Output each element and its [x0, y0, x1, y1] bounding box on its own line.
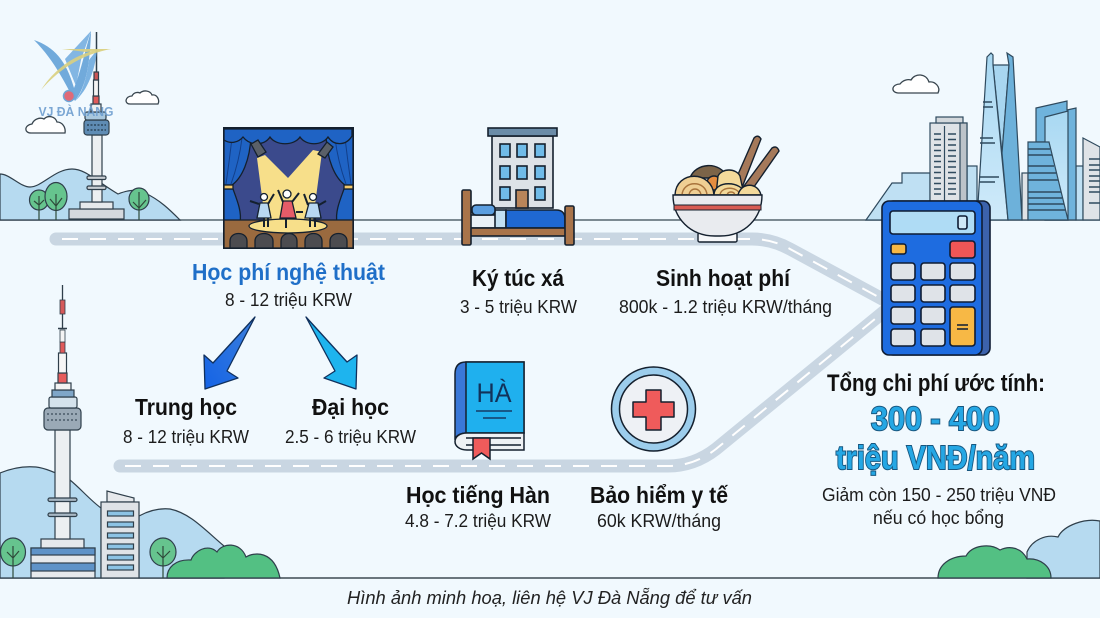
- scene: bottom-right bushes: [938, 520, 1100, 578]
- heading: Học tiếng Hàn: 4.8 - 7.2 triệu KRW: [405, 511, 551, 531]
- heading: Bảo hiểm y tế: 60k KRW/tháng: [597, 511, 721, 531]
- heading: Học tiếng Hàn: Học tiếng Hàn: [406, 482, 550, 508]
- arrow: to Trung học: [204, 317, 255, 389]
- heading: Đại học: 2.5 - 6 triệu KRW: [285, 427, 416, 447]
- top road: [56, 239, 886, 301]
- cloud left: [26, 117, 65, 133]
- scene: top-left tower with hills: [0, 32, 180, 220]
- heading: Ký túc xá: 3 - 5 triệu KRW: [460, 297, 577, 317]
- heading: Học phí nghệ thuật: [192, 259, 385, 310]
- cloud right: [893, 75, 939, 93]
- total cost block: Tổng chi phí ước tính:: [827, 370, 1045, 397]
- logo VJ Đà Nẵng: VJ ĐÀ NẴNG: [38, 104, 114, 119]
- heading: Học tiếng Hàn: [405, 482, 551, 531]
- ground line bottom: [0, 577, 1100, 579]
- heading: Bảo hiểm y tế: [590, 482, 728, 531]
- icon: noodle bowl: [673, 136, 779, 242]
- heading: Đại học: [285, 394, 416, 447]
- heading: Sinh hoạt phí: Sinh hoạt phí: [656, 265, 791, 291]
- icon: dormitory and bed: [462, 128, 574, 245]
- heading: Sinh hoạt phí: 800k - 1.2 triệu KRW/tháng: [619, 297, 832, 317]
- heading: Ký túc xá: Ký túc xá: [472, 265, 564, 291]
- total cost block: Giảm còn 150 - 250 triệu VNĐ: [822, 485, 1056, 505]
- ground line top: [0, 219, 1100, 221]
- heading: Trung học: Trung học: [135, 394, 237, 420]
- scene: bottom-left tower with hills and building: [0, 285, 280, 578]
- skyline right: [866, 53, 1100, 220]
- heading: Ký túc xá: [460, 265, 577, 317]
- heading: Học phí nghệ thuật: 8 - 12 triệu KRW: [225, 290, 352, 310]
- heading: Trung học: [123, 394, 249, 447]
- icon: health insurance cross: [612, 367, 696, 451]
- logo VJ Đà Nẵng: [34, 31, 114, 119]
- total cost block: nếu có học bổng: [873, 508, 1004, 528]
- lower road: [120, 310, 886, 466]
- icon: Korean book: [455, 362, 524, 459]
- heading: Đại học: Đại học: [312, 394, 389, 420]
- heading: Trung học: 8 - 12 triệu KRW: [123, 427, 249, 447]
- heading: Học phí nghệ thuật: Học phí nghệ thuật: [192, 259, 385, 285]
- icon: Korean book: HÀ: [476, 378, 512, 408]
- icon: theatre stage: [224, 128, 353, 248]
- cloud middle: [126, 91, 159, 104]
- icon: calculator: [882, 201, 990, 355]
- total cost block: 300 - 400: [871, 400, 1000, 437]
- heading: Sinh hoạt phí: [619, 265, 832, 317]
- caption: Hình ảnh minh hoạ, liên hệ VJ Đà Nẵng để tư vấn: [347, 588, 752, 608]
- heading: Bảo hiểm y tế: Bảo hiểm y tế: [590, 482, 728, 508]
- total cost block: [822, 370, 1056, 528]
- total cost block: triệu VNĐ/năm: [836, 439, 1035, 476]
- arrow: to Đại học: [306, 317, 357, 389]
